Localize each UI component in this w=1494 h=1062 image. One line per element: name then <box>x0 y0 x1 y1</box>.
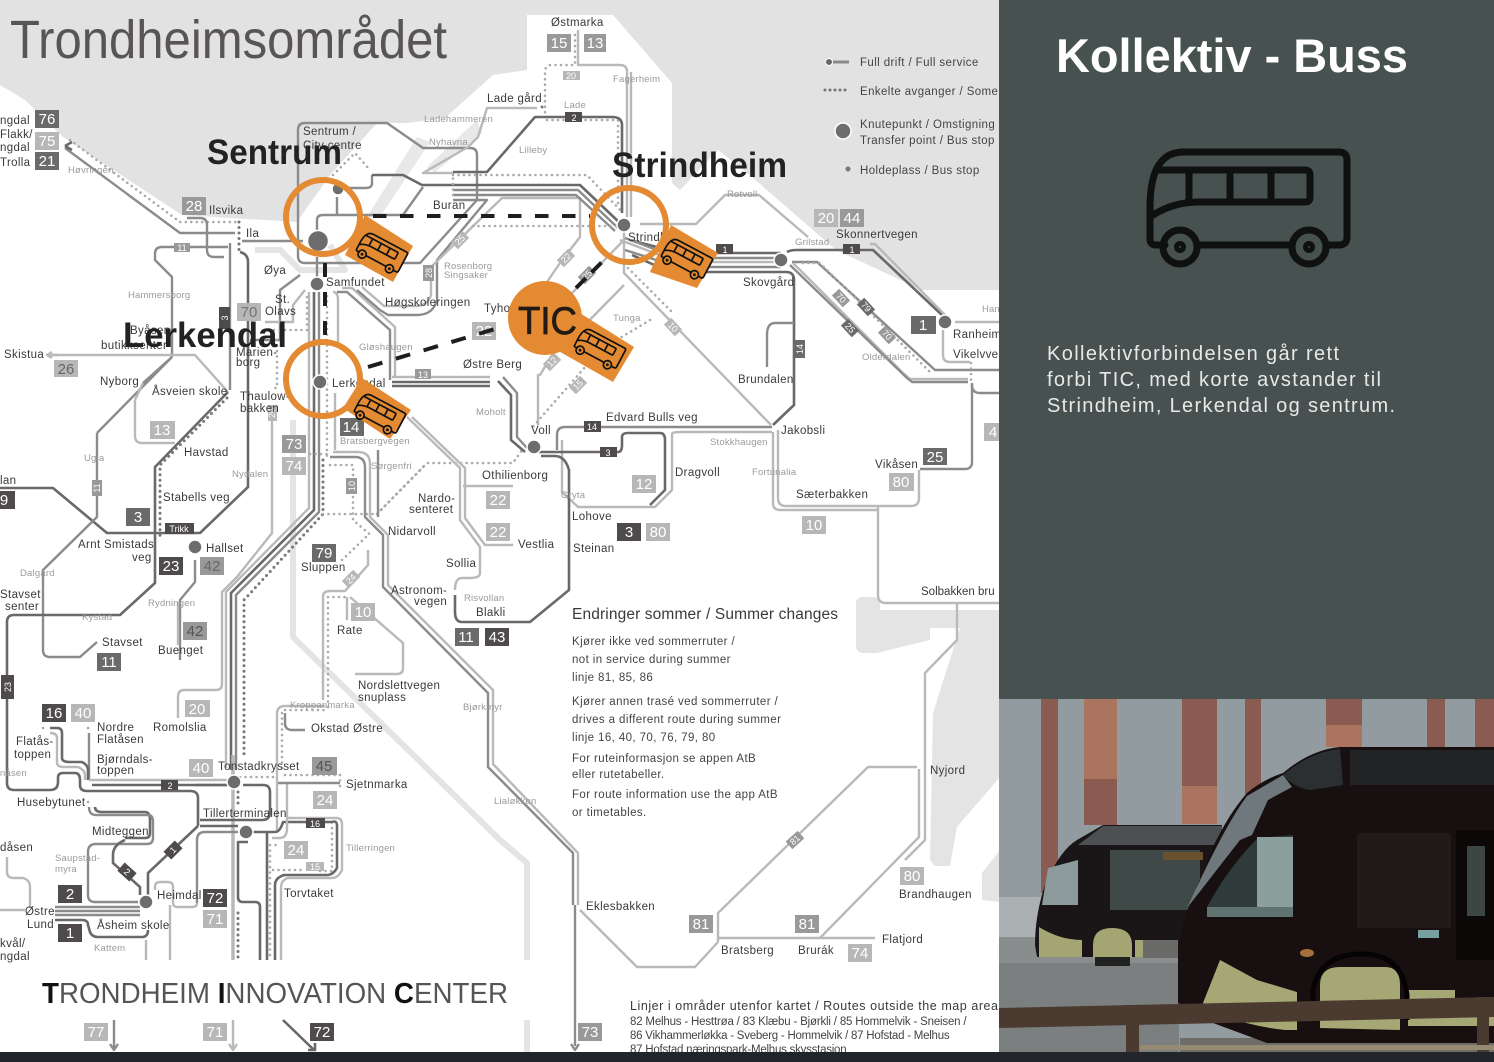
map: route badges: 14 <box>343 419 359 436</box>
map: route badges: 25 <box>927 449 943 466</box>
map: place names: Dalgård <box>20 568 55 579</box>
legend: Transfer point / Bus stop <box>860 135 995 147</box>
map: route badges: 44 <box>844 210 860 227</box>
small inline badges: 28 <box>424 268 434 278</box>
map: place names: Lialøkken <box>494 796 536 807</box>
map: place names: Singsaker <box>444 270 488 281</box>
map: place names: Edvard Bulls veg <box>606 412 698 424</box>
map: place names: Tyholt <box>484 303 517 315</box>
map: place names: Gryta <box>561 490 586 501</box>
small inline badges: 1 <box>849 245 855 255</box>
map: place names: Moholt <box>476 407 506 418</box>
small inline badges: 2 <box>571 113 577 123</box>
map: place names: Dragvoll <box>675 467 720 479</box>
callout: Sentrum magnifier <box>286 180 413 282</box>
small inline badges: 70 <box>834 291 848 305</box>
map: place names: Astronom- <box>391 585 447 597</box>
map: route badges: 71 <box>207 1024 223 1041</box>
summer changes note: eller rutetabeller. <box>572 769 665 781</box>
routes outside map note: 82 Melhus - Hesttrøa / 83 Klæbu - Bjørkli / 85 Hommelvik - Sneisen / <box>630 1016 967 1028</box>
map: route badges: 71 <box>207 911 223 928</box>
summer changes note: or timetables. <box>572 807 647 819</box>
routes outside map note <box>630 999 998 1056</box>
map: place names: Sluppen <box>301 562 346 574</box>
map: place names: Skonnertvegen <box>836 229 918 241</box>
map: place names: Lade <box>564 100 586 111</box>
map: place names: Nordslettvegen <box>358 680 440 692</box>
map: place names: Kystad <box>82 612 112 623</box>
map: place names: Stavset <box>102 637 143 649</box>
map: place names: Marien- <box>236 347 277 359</box>
map: route badges: 75 <box>39 133 55 150</box>
centre box <box>298 123 477 263</box>
map: route badges: 22 <box>490 492 506 509</box>
map: place names: Kattem <box>94 943 125 954</box>
map: place names: Hallset <box>206 543 244 555</box>
summer changes note: Kjører ikke ved sommerruter / <box>572 636 735 648</box>
map: place names: Gløshaugen <box>359 342 413 353</box>
map: place names: toppen <box>14 749 51 761</box>
map: place names: bakken <box>240 403 279 415</box>
map: route badges: 80 <box>650 524 666 541</box>
map: place names: Lilleby <box>519 145 547 156</box>
map: route badges: 3 <box>625 524 633 541</box>
map: route badges: 23 <box>163 558 179 575</box>
map: place names: veg <box>132 552 152 564</box>
map: route badges: 45 <box>316 758 332 775</box>
map: place names: ngdal <box>0 951 30 963</box>
small inline badges: 15 <box>571 378 585 392</box>
map: route badges: 1 <box>66 925 74 942</box>
legend <box>825 57 998 177</box>
map: place names: Samfundet <box>326 277 385 289</box>
small inline badges: 23 <box>3 682 13 692</box>
map: place names: ngdal <box>0 142 30 154</box>
east routes <box>630 240 781 253</box>
small inline badges: 12 <box>545 355 559 369</box>
summer changes note: Endringer sommer / Summer changes <box>572 606 838 623</box>
map: place names: Lund <box>27 919 54 931</box>
small inline badges: 25 <box>843 321 857 335</box>
map: route lines <box>0 30 1000 1050</box>
map: place names: Heimdal <box>157 890 202 902</box>
map: place names: Ila <box>246 228 259 240</box>
routes outside map note: 86 Vikhammerløkka - Sveberg - Hommelvik / 87 Hofstad - Melhus <box>630 1030 950 1042</box>
map: place names: senteret <box>409 504 454 516</box>
routes outside map note: 87 Hofstad næringspark-Melhus skysstasjon <box>630 1044 847 1056</box>
map: route badges: 11 <box>101 654 117 671</box>
map: place names: dåsen <box>0 842 33 854</box>
map: place names: Byåsen <box>130 325 170 337</box>
heading: Lerkendal: Lerkendal <box>123 316 287 355</box>
map: route badges: 42 <box>204 558 220 575</box>
map: place names: Torvtaket <box>284 888 334 900</box>
map: route badges: 20 <box>189 701 205 718</box>
map: place names: Vikelvvei <box>953 349 1001 361</box>
dashed connections between TIC and hubs <box>325 216 606 367</box>
map: place names: Fagerheim <box>613 74 660 85</box>
map: place names: nåsen <box>0 768 27 779</box>
pale land south-east <box>856 597 1000 866</box>
map: place names: Vikåsen <box>875 459 918 471</box>
map: place names: Buran <box>433 200 465 212</box>
small inline badges: 79 <box>859 300 873 314</box>
map: place names: Høvringen <box>68 165 114 176</box>
small inline badges: 2 <box>122 867 132 877</box>
map: place names: Flakk/ <box>0 129 33 141</box>
map: route badges: 40 <box>75 705 91 722</box>
map: place names: Steinan <box>573 543 614 555</box>
small inline badges: 70 <box>880 328 894 342</box>
map: place names: Stokkhaugen <box>710 437 768 448</box>
summer changes note: not in service during summer <box>572 654 731 666</box>
map: route badges: 72 <box>207 890 223 907</box>
map: place names: Othilienborg <box>482 470 548 482</box>
callout: Lerkendal magnifier <box>286 342 411 439</box>
Strindheim south <box>624 232 771 425</box>
map: place names: senter <box>5 601 39 613</box>
map: place names: Rate <box>337 625 363 637</box>
south-west <box>88 733 90 780</box>
map: route badges: 15 <box>551 35 567 52</box>
map: route badges: 21 <box>39 153 55 170</box>
map: route badges: 43 <box>489 629 505 646</box>
map: place names: Romolslia <box>153 722 207 734</box>
summer changes note: linje 81, 85, 86 <box>572 672 653 684</box>
map: place names: Tonstadkrysset <box>218 761 300 773</box>
front bus <box>1178 747 1494 1043</box>
small inline badges: 20 <box>566 71 576 81</box>
map: place names: Flatås- <box>16 736 54 748</box>
map: place names: Hammer <box>982 304 1020 315</box>
map: place names: Vestlia <box>518 539 555 551</box>
map: place names: Østre <box>25 906 55 918</box>
map: place names: Flatåsen <box>97 734 144 746</box>
panel heading: Kollektiv - Buss <box>1056 29 1408 82</box>
summer changes note: linje 16, 40, 70, 76, 79, 80 <box>572 732 716 744</box>
map: place names: Nyborg <box>100 376 139 388</box>
map: place names: Nyjord <box>930 765 965 777</box>
map: place names: Midteggen <box>92 826 149 838</box>
title: Trondheimsområdet: Trondheimsområdet <box>10 10 447 70</box>
map: route badges: 76 <box>39 111 55 128</box>
map: place names: myra <box>55 864 77 875</box>
summer changes note: For route information use the app AtB <box>572 789 778 801</box>
map: route badges: 26 <box>58 361 74 378</box>
legend: Knutepunkt / Omstigning <box>860 119 995 131</box>
map: place names: Hammersborg <box>128 290 190 301</box>
map: route badges: 73 <box>286 436 302 453</box>
map: place names: Tillerringen <box>346 843 395 854</box>
map: place names: Sjetnmarka <box>346 779 408 791</box>
map: place names: Brandhaugen <box>899 889 972 901</box>
map: place names: ngdal <box>0 115 30 127</box>
south corridor <box>330 457 573 905</box>
panel description: forbi TIC, med korte avstander til <box>1047 369 1381 391</box>
map: place names: Ranheim <box>953 329 1001 341</box>
west routes <box>65 148 235 233</box>
legend: Full drift / Full service <box>860 57 979 69</box>
map: place names: City centre <box>303 140 362 152</box>
map: route badges: 72 <box>314 1024 330 1041</box>
map: place names: Bratsbergvegen <box>340 436 410 447</box>
map: place names: Tunga <box>613 313 641 324</box>
map: place names: Bjørndals- <box>97 754 153 766</box>
map: route badges: 80 <box>904 868 920 885</box>
map: route badges: 3 <box>134 509 142 526</box>
routes outside map note: Linjer i områder utenfor kartet / Routes outside the map area <box>630 999 998 1013</box>
photo: electric buses <box>999 699 1494 1053</box>
map: route badges: 74 <box>286 458 302 475</box>
small inline badges: 25 <box>580 268 594 282</box>
map: route badges: 16 <box>46 705 62 722</box>
map: place names: Blakli <box>476 607 506 619</box>
map: place names: Nardo- <box>418 493 455 505</box>
map: route badges: 81 <box>799 916 815 933</box>
small inline badges: 10 <box>666 320 680 334</box>
map: place names: Rosenborg <box>444 261 492 272</box>
map: place names: Sørgenfri <box>371 461 412 472</box>
map: place names: borg <box>236 357 260 369</box>
brand: Trondheim Innovation Center: TRONDHEIM INNOVATION CENTER <box>42 978 508 1010</box>
map: route badges: 73 <box>582 1024 598 1041</box>
map: route badges: 9 <box>0 492 8 509</box>
map: place names: Grilstad <box>795 237 829 248</box>
map: place names: Lerkendal <box>332 378 386 390</box>
icon: bus <box>1150 152 1347 264</box>
map: place names: Sollia <box>446 558 476 570</box>
map: place names: Okstad Østre <box>311 723 383 735</box>
map: place names: Ilsvika <box>209 205 244 217</box>
map: place names: Stavset <box>0 589 41 601</box>
map: place names: toppen <box>97 765 134 777</box>
map: place names: Arnt Smistads <box>78 539 154 551</box>
map: place names: lan <box>0 475 16 487</box>
map: place names: Trolla <box>0 157 31 169</box>
map background <box>0 0 1000 1052</box>
panel: Kollektiv - Buss <box>999 0 1494 700</box>
map: place names: Fortunalia <box>752 467 797 478</box>
Buran bundle <box>372 175 622 225</box>
map: place names: Nidarvoll <box>388 526 436 538</box>
map: route badges: 13 <box>154 422 170 439</box>
small inline badges <box>1 71 896 881</box>
small inline badges: 14 <box>587 422 597 432</box>
map: route badges: 42 <box>187 623 203 640</box>
map: route badges: 79 <box>316 545 332 562</box>
map: place names: Rotvoll <box>727 189 757 200</box>
map: place names: Rydningen <box>148 598 195 609</box>
map: place names: Voll <box>531 425 551 437</box>
map: route badges: 12 <box>636 476 652 493</box>
map: route badges: 40 <box>193 760 209 777</box>
peninsula north <box>578 30 627 217</box>
map: route badges: 74 <box>852 945 868 962</box>
small inline badges: 3 <box>605 448 611 458</box>
pale land far south-east <box>982 850 1000 902</box>
map: place names: Ladehammeren <box>424 114 493 125</box>
map: place names: Nydalen <box>232 469 268 480</box>
bottom strip <box>0 1052 1494 1062</box>
fence <box>999 997 1494 1053</box>
map: route badges: 22 <box>476 323 492 340</box>
map: place names: Skistua <box>4 349 44 361</box>
map: place names: Solbakken bru <box>921 586 995 598</box>
panel description: Kollektivforbindelsen går rett <box>1047 343 1339 365</box>
map: route badges: 4 <box>989 424 997 441</box>
pale harbour bands <box>367 120 482 217</box>
small inline badges: 1 <box>722 245 728 255</box>
map: place names: Strindheim <box>628 232 686 244</box>
small inline badges: 81 <box>788 833 802 847</box>
map: place names: Flatjord <box>882 934 923 946</box>
summer changes note <box>572 606 838 819</box>
map: place names <box>0 17 1020 963</box>
map: place names: Stabells veg <box>163 492 230 504</box>
map: place names: Jakobsli <box>781 425 825 437</box>
summer changes note: drives a different route during summer <box>572 714 781 726</box>
small inline badges: 22 <box>559 251 573 265</box>
callout: Strindheim magnifier <box>592 188 718 288</box>
small inline badges: 11 <box>92 483 102 493</box>
map: place names: Åsheim skole <box>97 919 170 932</box>
map: place names: Bjørkmyr <box>463 702 503 713</box>
map: route badges: 20 <box>818 210 834 227</box>
map: route badges: 70 <box>241 304 257 321</box>
map: place names: Ugla <box>84 453 105 464</box>
map: route badges: 28 <box>186 198 202 215</box>
small inline badges: 3 <box>220 315 230 321</box>
small inline badges: 10 <box>347 481 357 491</box>
map: route badges: 13 <box>587 35 603 52</box>
river Nidelva <box>255 245 527 1052</box>
map: route badges: 10 <box>355 604 371 621</box>
map: place names: Lohove <box>572 511 612 523</box>
map: place names: Buenget <box>158 645 204 657</box>
small inline badges: 14 <box>795 344 805 354</box>
map: place names: Østmarka <box>551 17 604 29</box>
map: place names: Sæterbakken <box>796 489 868 501</box>
small inline badges: 25 <box>453 233 467 247</box>
map: place names: Brurák <box>798 945 834 957</box>
map: place names: Høgskoleringen <box>385 297 470 309</box>
map: place names: Eklesbakken <box>586 901 655 913</box>
map: route badges: 22 <box>490 524 506 541</box>
map: place names: Nyhavna <box>429 137 468 148</box>
south centre <box>323 550 368 700</box>
small inline badges: 20 <box>267 408 277 418</box>
map: route badges: 10 <box>806 517 822 534</box>
map: route badges: 11 <box>458 629 474 646</box>
map: place names: Olderdalen <box>862 352 910 363</box>
callout: TIC marker <box>508 281 634 382</box>
map: place names: Brundalen <box>738 374 794 386</box>
map: route badges: 24 <box>288 842 304 859</box>
map: place names: Olavs <box>265 306 296 318</box>
map: place names: Husebytunet <box>17 797 86 809</box>
panel description <box>1047 343 1395 417</box>
map: route badges: 81 <box>693 916 709 933</box>
map: place names: kvål/ <box>0 938 26 950</box>
callout: TIC marker: TIC <box>518 300 577 343</box>
map: place names: Kroppanmarka <box>290 700 355 711</box>
arrows to outside <box>110 1020 118 1050</box>
map: place names: Thaulow- <box>240 391 290 403</box>
panel description: Strindheim, Lerkendal og sentrum. <box>1047 395 1395 417</box>
small inline badges: 1 <box>168 845 178 855</box>
map: place names: Åsveien skole <box>152 385 228 398</box>
small inline badges: 11 <box>177 243 187 253</box>
small inline badges: 24 <box>344 572 358 586</box>
map: place names: Østre Berg <box>463 359 522 371</box>
map: place names: Lade gård <box>487 93 542 105</box>
map: place names: Bratsberg <box>721 945 774 957</box>
legend: Holdeplass / Bus stop <box>860 165 980 177</box>
map: place names: Tillerterminalen <box>203 808 287 820</box>
map: place names: Øya <box>264 265 286 277</box>
map: place names: Havstad <box>184 447 229 459</box>
map: route badges <box>0 34 1000 1041</box>
summer changes note: Kjører annen trasé ved sommerruter / <box>572 696 779 708</box>
map: place names: Sentrum / <box>303 126 356 138</box>
map: place names: vegen <box>414 596 447 608</box>
heading: Strindheim: Strindheim <box>612 146 787 185</box>
map: route badges: 2 <box>66 886 74 903</box>
legend: Enkelte avganger / Some <box>860 86 998 98</box>
summer changes note: For ruteinformasjon se appen AtB <box>572 753 756 765</box>
map: place names: Skovgård <box>743 277 794 289</box>
water: fjord <box>0 0 1000 290</box>
back bus <box>1035 825 1222 966</box>
map: place names: snuplass <box>358 692 406 704</box>
Lerkendal / Voll <box>392 376 490 378</box>
small inline badges: 15 <box>310 862 320 872</box>
map: route badges: 80 <box>893 474 909 491</box>
small inline badges: 16 <box>310 819 320 829</box>
map: place names: butikksenter <box>101 340 167 352</box>
heading: Sentrum: Sentrum <box>207 133 342 172</box>
map: route badges: 77 <box>88 1024 104 1041</box>
map: place names: Nordre <box>97 722 134 734</box>
small inline badges: 2 <box>167 781 173 791</box>
small inline badges: 13 <box>418 370 428 380</box>
map: stations <box>139 183 952 909</box>
map: route badges: 1 <box>919 317 927 334</box>
map: route badges: Trikk <box>169 524 189 534</box>
map: place names: Risvollan <box>464 593 504 604</box>
map: route badges: 24 <box>317 792 333 809</box>
map: place names: St. <box>275 294 290 306</box>
map: place names: Saupstad- <box>55 853 100 864</box>
main corridor <box>226 292 309 768</box>
